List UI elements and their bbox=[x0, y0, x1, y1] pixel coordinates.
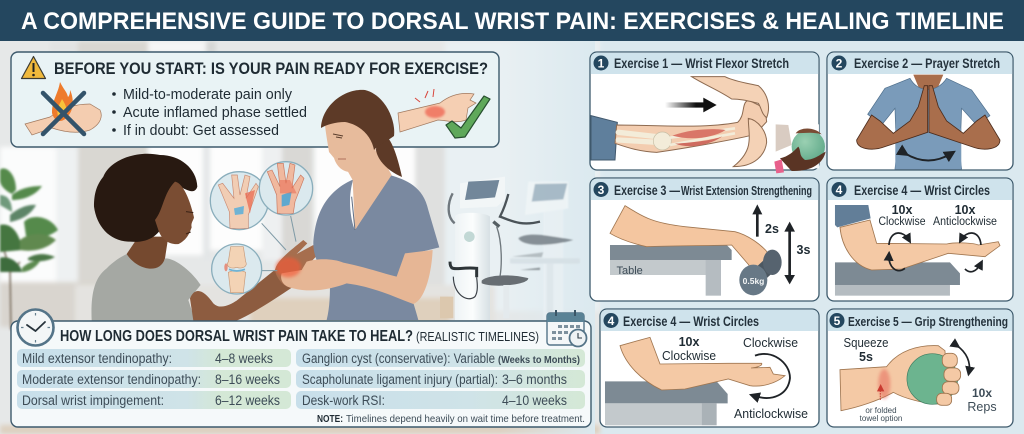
panel heading: BEFORE YOU START: IS YOUR PAIN READY FOR EXERCISE? bbox=[54, 59, 488, 78]
label: 10x clockwise: Clockwise bbox=[878, 216, 926, 228]
badge 4: 4 bbox=[608, 314, 615, 328]
timeline rows bbox=[17, 349, 585, 409]
timeline rows: (Weeks to Months) bbox=[498, 355, 580, 366]
icon: calendar bbox=[547, 310, 586, 346]
bullet list: Acute inflamed phase settled bbox=[123, 104, 307, 121]
label: 2s: 2s bbox=[765, 222, 779, 236]
illustration: wrist extension bbox=[610, 204, 795, 296]
timeline rows: Mild extensor tendinopathy: bbox=[22, 351, 172, 366]
label: towel option: or folded bbox=[865, 406, 897, 415]
label: anticlockwise: Anticlockwise bbox=[734, 407, 808, 421]
bullet list bbox=[112, 86, 307, 139]
inset: grip ball bbox=[771, 124, 826, 173]
card title: Wrist Extension Strengthening bbox=[681, 184, 812, 198]
inset: hand anatomy 2 bbox=[259, 162, 313, 215]
patient arm bbox=[190, 268, 293, 321]
icon: settled wrist with check mark bbox=[398, 89, 490, 138]
label: towel option bbox=[860, 406, 902, 423]
timeline rows: 3–6 months bbox=[502, 372, 567, 387]
card title: Exercise 4 — Wrist Circles bbox=[623, 314, 759, 329]
plant bbox=[0, 168, 58, 330]
label: squeeze 5s: 5s bbox=[859, 350, 873, 364]
clinic scene background bbox=[0, 41, 600, 434]
card title: Exercise 4 — Wrist Circles bbox=[854, 183, 990, 198]
card: exercise 3 bbox=[590, 178, 819, 301]
timeline subheading: (REALISTIC TIMELINES) bbox=[416, 329, 539, 344]
therapist arm bbox=[281, 250, 433, 304]
label: 10x clockwise: 10x bbox=[679, 335, 699, 349]
illustration: grip strengthening bbox=[840, 346, 969, 411]
badge 3 bbox=[594, 182, 608, 197]
badge 5: 5 bbox=[834, 314, 841, 328]
card: exercise 4 repeat bbox=[600, 309, 819, 427]
label: 3s: 3s bbox=[796, 243, 810, 257]
illustration: wrist circles bbox=[835, 205, 1000, 296]
illustration: wrist circles detail bbox=[605, 337, 790, 425]
label: towel option: towel option bbox=[860, 414, 902, 423]
patient hand bbox=[275, 240, 316, 287]
therapist neck bbox=[343, 150, 392, 230]
timeline note: Timelines depend heavily on wait time before treatment. bbox=[346, 413, 585, 425]
label: 10x anticlockwise bbox=[933, 203, 997, 228]
header bar bbox=[0, 0, 1024, 41]
timeline rows: Scapholunate ligament injury (partial): bbox=[302, 372, 498, 387]
card: exercise 4 bbox=[827, 178, 1013, 301]
patient hair bbox=[94, 154, 197, 242]
warning panel bbox=[11, 52, 499, 147]
inset: joint bbox=[212, 244, 262, 294]
timeline heading: HOW LONG DOES DORSAL WRIST PAIN TAKE TO HEAL? bbox=[60, 328, 413, 345]
card title bbox=[614, 183, 812, 198]
timeline rows: Desk-work RSI: bbox=[302, 393, 385, 408]
timeline rows: Ganglion cyst (conservative): Variable bbox=[302, 351, 495, 366]
inset: hand anatomy 1 bbox=[210, 172, 296, 271]
label: weight: 0.5kg bbox=[743, 276, 764, 286]
badge 1 bbox=[594, 56, 608, 70]
label: 10x anticlockwise: Anticlockwise bbox=[933, 216, 997, 228]
timeline note: NOTE: bbox=[317, 413, 343, 425]
badge 4 bbox=[604, 313, 618, 328]
label: 10x clockwise bbox=[878, 203, 926, 228]
timeline rows: 4–8 weeks bbox=[215, 351, 273, 366]
therapist scrub bbox=[313, 175, 439, 320]
card: exercise 1 bbox=[590, 52, 826, 173]
label: 10x clockwise bbox=[662, 335, 716, 363]
label: 10x clockwise: Clockwise bbox=[662, 349, 716, 363]
card: exercise 2 bbox=[827, 52, 1013, 170]
label: squeeze 5s: Squeeze bbox=[844, 336, 889, 350]
label: 10x reps: 10x bbox=[972, 386, 992, 400]
label: 10x clockwise: 10x bbox=[892, 203, 912, 217]
badge 3: 3 bbox=[598, 183, 605, 197]
badge 2: 2 bbox=[836, 56, 843, 70]
timeline rows: Moderate extensor tendinopathy: bbox=[22, 372, 201, 387]
patient face bbox=[155, 182, 194, 244]
label: 10x anticlockwise: 10x bbox=[955, 203, 975, 217]
timeline rows: 6–12 weeks bbox=[215, 393, 280, 408]
timeline rows: 8–16 weeks bbox=[215, 372, 280, 387]
icon: inflamed wrist crossed out bbox=[25, 82, 101, 135]
card: exercise 5 bbox=[827, 309, 1013, 427]
label: table: Table bbox=[616, 265, 643, 277]
illustration: prayer stretch bbox=[857, 75, 1000, 169]
label: squeeze 5s bbox=[844, 336, 889, 364]
wrist glow bbox=[276, 257, 301, 277]
badge 4: 4 bbox=[836, 183, 843, 197]
timeline rows: 4–10 weeks bbox=[502, 393, 567, 408]
patient neck bbox=[127, 237, 168, 269]
timeline rows: Dorsal wrist impingement: bbox=[22, 393, 164, 408]
card title: Exercise 1 — Wrist Flexor Stretch bbox=[614, 56, 789, 71]
badge 2 bbox=[832, 56, 846, 70]
label: 10x reps: Reps bbox=[967, 400, 997, 414]
patient shirt bbox=[91, 253, 201, 321]
therapist head bbox=[321, 90, 402, 177]
label: 10x reps bbox=[967, 386, 997, 414]
card title: Exercise 3 — bbox=[614, 183, 680, 198]
icon: clock bbox=[18, 310, 54, 346]
label: clockwise: Clockwise bbox=[743, 336, 798, 350]
bullet list: Mild-to-moderate pain only bbox=[123, 86, 292, 103]
timeline panel bbox=[11, 310, 591, 427]
therapy machines bbox=[440, 177, 580, 320]
badge 1: 1 bbox=[598, 56, 605, 70]
bullet list: If in doubt: Get assessed bbox=[123, 122, 279, 139]
badge 4 bbox=[832, 182, 846, 197]
scene: patient and therapist bbox=[91, 150, 439, 321]
badge 5 bbox=[830, 313, 844, 328]
illustration: flexor stretch bbox=[591, 77, 826, 173]
icon: warning triangle bbox=[22, 56, 46, 78]
